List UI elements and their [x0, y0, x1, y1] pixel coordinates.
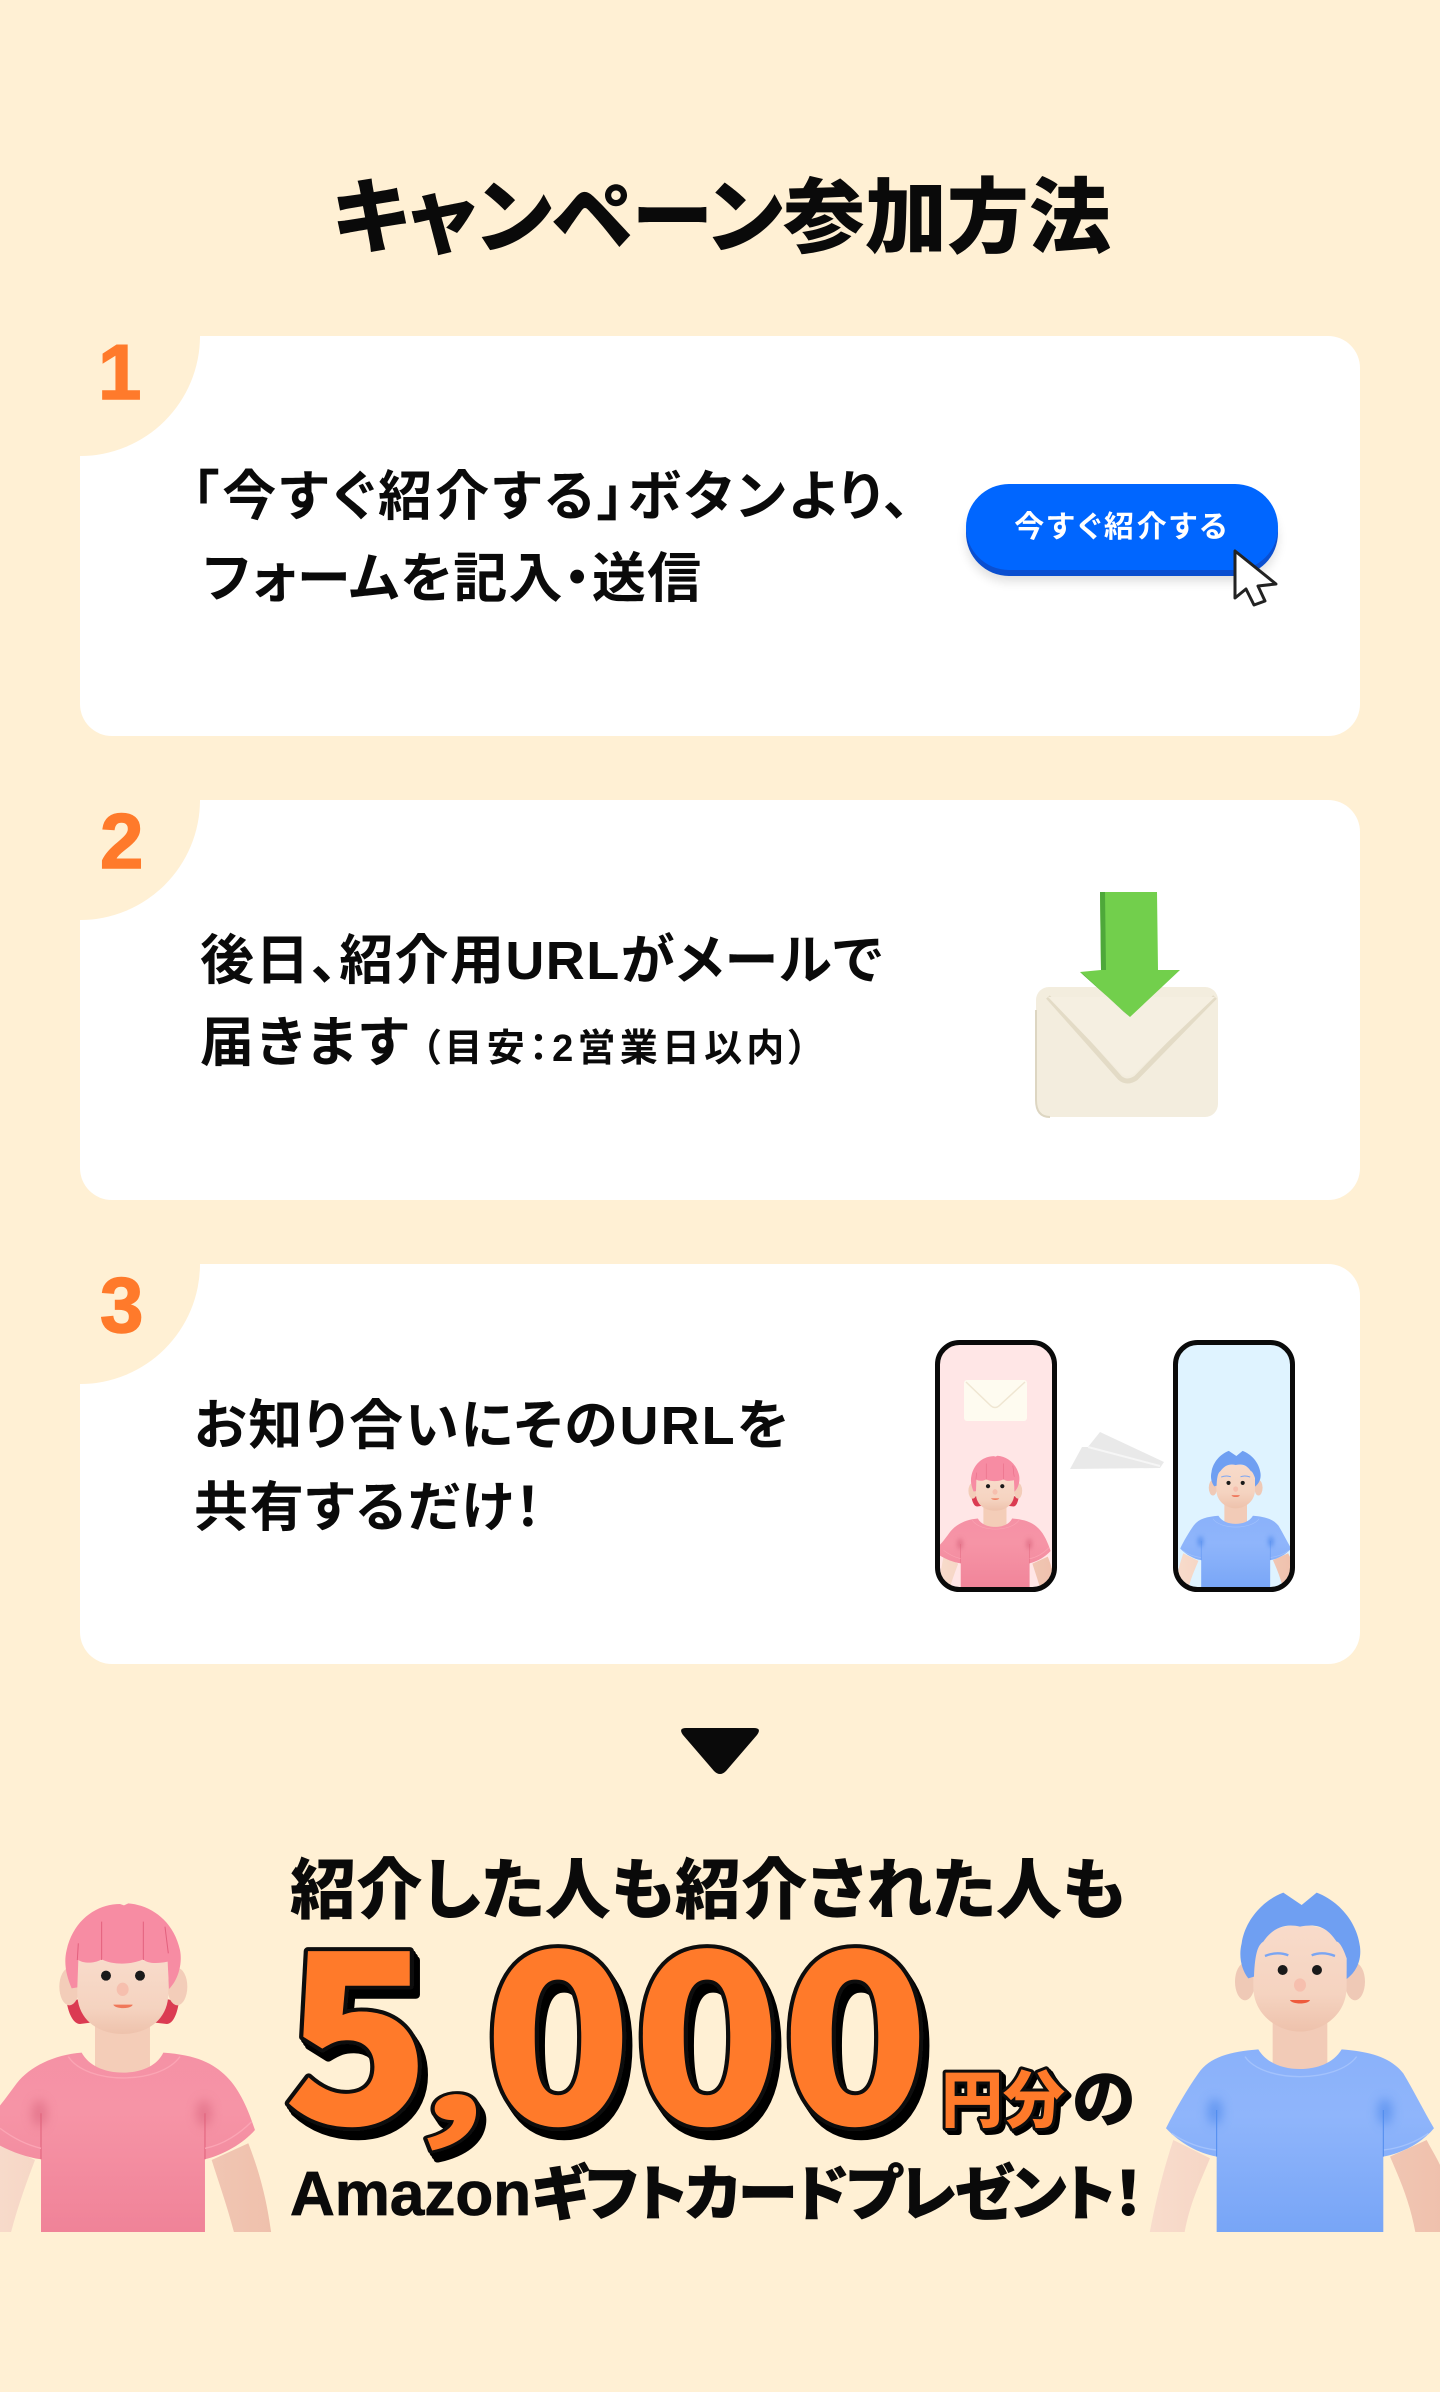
step number 1: 1: [98, 328, 141, 416]
arrow down: [681, 1728, 759, 1774]
button: [966, 484, 1278, 570]
big amount: 5,000 yen: の: [1072, 2049, 1135, 2141]
button: 今すぐ紹介する: [1014, 511, 1230, 544]
icon: envelope with download arrow: [1035, 892, 1218, 1118]
panel: step 3: [80, 1264, 1360, 1664]
icon: mouse cursor: [1234, 549, 1278, 606]
step 1 text: 「今すぐ紹介する」ボタンより、: [192, 467, 913, 527]
step 1 text: フォームを記入・送信: [203, 549, 702, 609]
big amount: 5,000 yen: 0: [781, 1855, 929, 2191]
step 1 text: [192, 467, 913, 609]
step 3 text: 共有するだけ！: [194, 1478, 543, 1538]
panel: step 2: [80, 800, 1360, 1200]
step 2 text: [200, 931, 883, 1073]
big amount: 5,000 yen: 5: [283, 1855, 431, 2191]
step number 3: 3: [100, 1261, 143, 1349]
big amount: 5,000 yen: 0: [484, 1855, 632, 2191]
big amount: 5,000 yen: [283, 1855, 1135, 2191]
step 3 text: [194, 1396, 791, 1538]
character: blue man: [1150, 1892, 1440, 2232]
big amount: 5,000 yen: 円分: [941, 2050, 1065, 2140]
character: pink woman: [0, 1903, 271, 2232]
step 2 text: 届きます （目安：2営業日以内）: [200, 1013, 812, 1073]
phone: sender: [935, 1340, 1057, 1592]
phone: receiver: [1173, 1340, 1295, 1592]
big amount: 5,000 yen: 0: [633, 1855, 781, 2191]
step number 2: 2: [100, 797, 143, 885]
text: Amazon gift card present: Amazonギフトカードプレゼント！: [290, 2160, 1142, 2229]
panel: step 1: [80, 336, 1360, 736]
step 2 text: 後日、紹介用URLがメールで: [200, 931, 883, 991]
heading: both get a reward: 紹介した人も紹介された人も: [290, 1853, 1126, 1927]
step 3 text: お知り合いにそのURLを: [194, 1396, 791, 1456]
big amount: 5,000 yen: ,: [415, 1970, 505, 2159]
title: キャンペーン参加方法: [332, 173, 1111, 264]
icon: paper plane: [1070, 1432, 1164, 1469]
